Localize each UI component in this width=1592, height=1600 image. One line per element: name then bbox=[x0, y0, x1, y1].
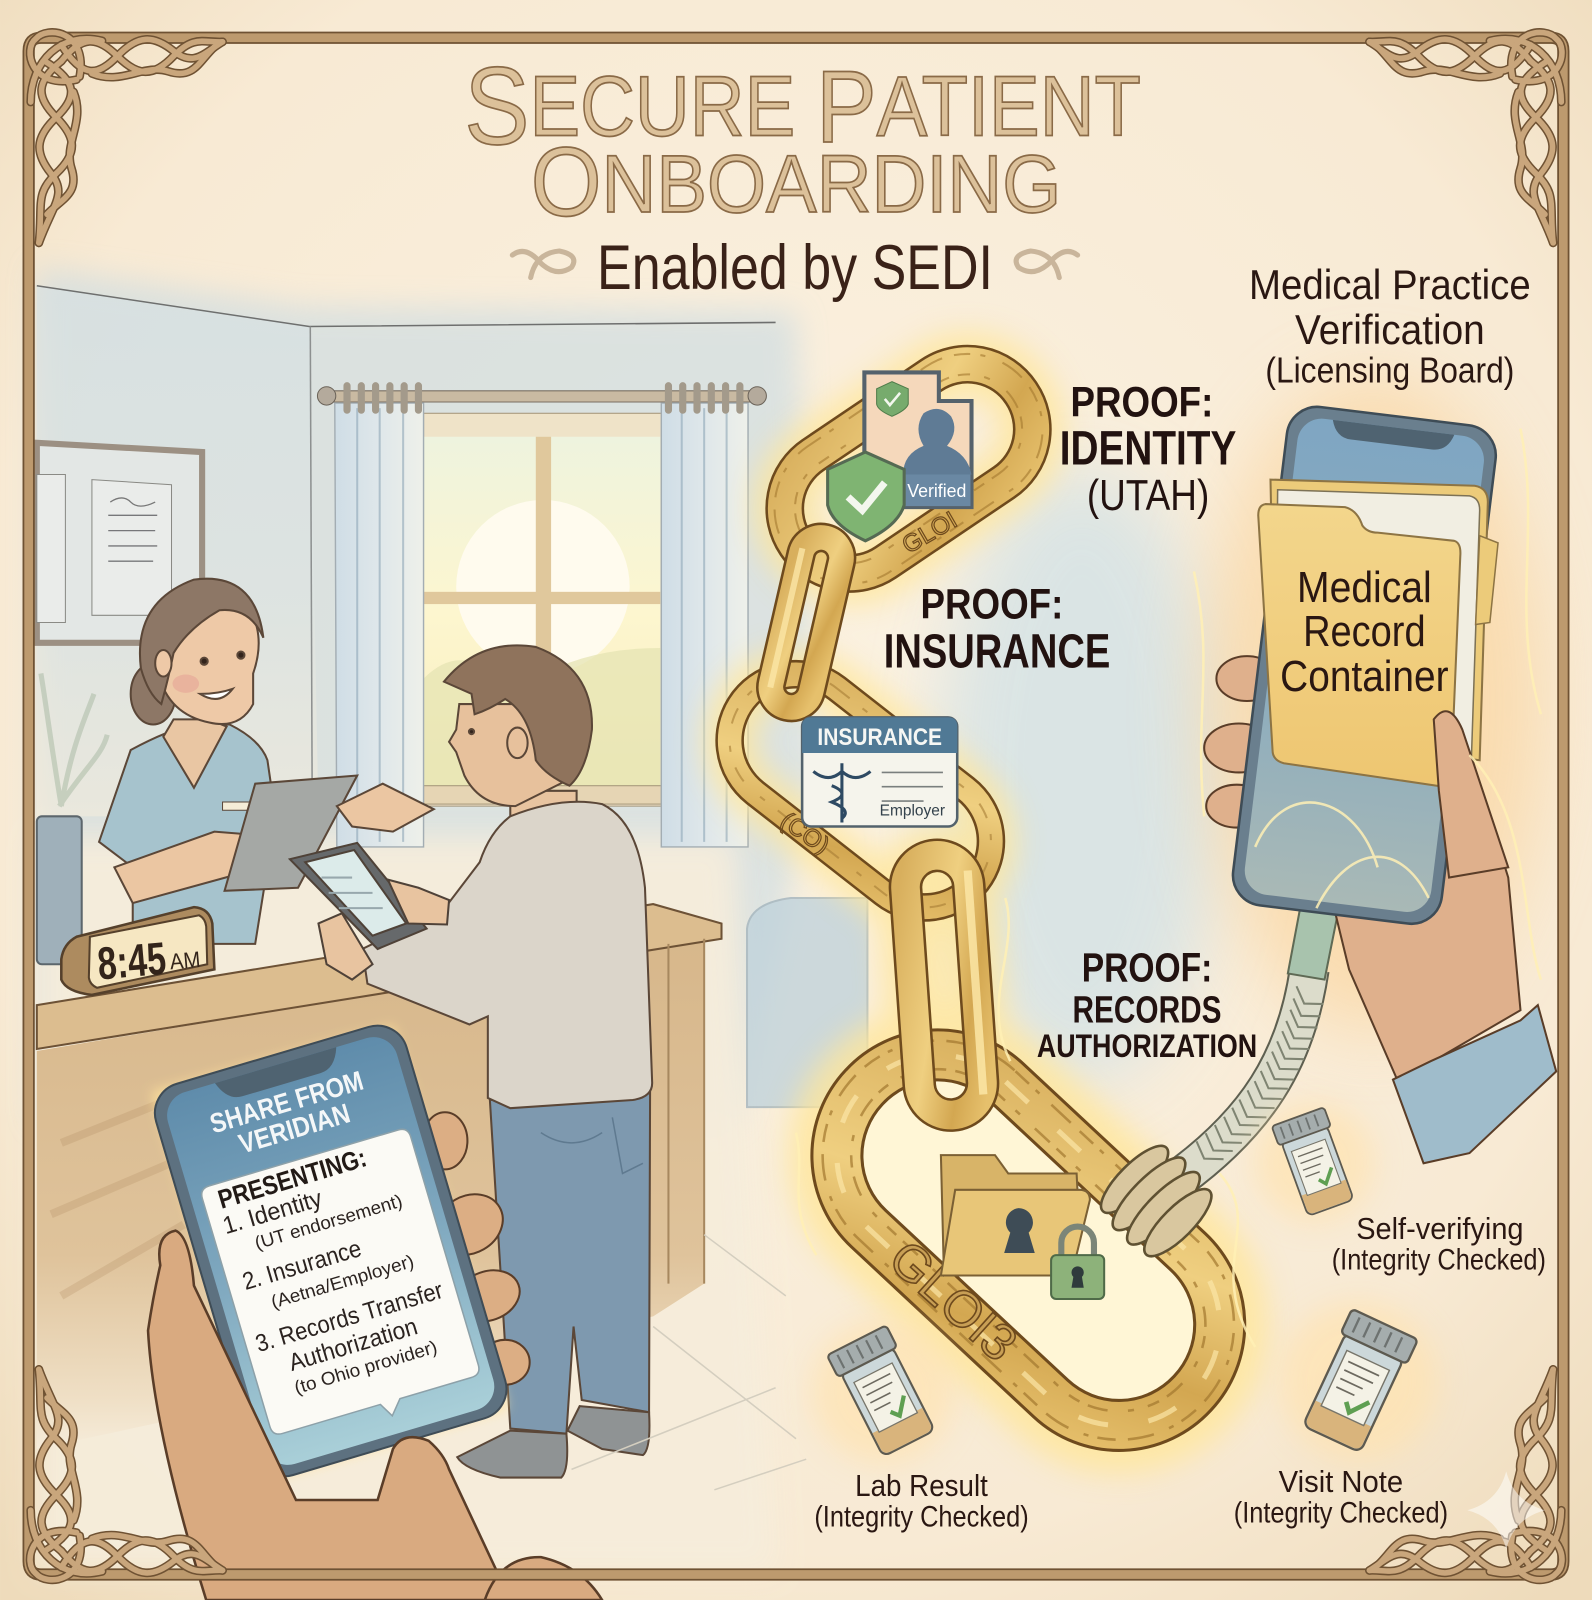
label: medical practice verification: Verification bbox=[1295, 306, 1485, 353]
label: lab result: (Integrity Checked) bbox=[814, 1501, 1029, 1534]
label: self-verifying bbox=[1332, 1212, 1546, 1276]
label: proof records authorization bbox=[1037, 945, 1257, 1064]
rope connector bbox=[1089, 903, 1339, 1268]
chain engravings: (CO) bbox=[775, 807, 834, 860]
room wash bbox=[37, 267, 1225, 1571]
reception desk bbox=[37, 904, 722, 1449]
bottle: self-verifying bbox=[1272, 1107, 1357, 1217]
label: medical practice verification: (Licensing Board) bbox=[1265, 351, 1514, 391]
foreground hand bbox=[148, 1231, 602, 1600]
sparkle watermark bbox=[1467, 1471, 1545, 1549]
label: proof identity: (UTAH) bbox=[1087, 471, 1209, 520]
corner knot bottom right bbox=[1369, 1369, 1562, 1580]
label: lab result: Lab Result bbox=[855, 1469, 988, 1503]
label: proof insurance bbox=[884, 580, 1110, 678]
chain link four bbox=[903, 853, 985, 1117]
icon: locked folder bbox=[941, 1155, 1090, 1276]
verified text: Verified bbox=[907, 480, 966, 501]
phone heading line two: VERIDIAN bbox=[235, 1097, 354, 1160]
glow behind right phone bbox=[1204, 378, 1541, 1031]
item one detail: (UT endorsement) bbox=[252, 1190, 405, 1253]
item three line two: Authorization bbox=[286, 1313, 421, 1377]
bottle halos bbox=[811, 1103, 1438, 1463]
label: visit note: Visit Note bbox=[1279, 1465, 1403, 1499]
label: proof identity bbox=[1060, 378, 1236, 520]
folder papers bbox=[1270, 480, 1498, 760]
chain engravings: GLOI bbox=[898, 507, 962, 559]
sleeve bbox=[1393, 1005, 1556, 1163]
framed poster bbox=[37, 443, 202, 643]
flourish right bbox=[1016, 251, 1078, 278]
phone: share from Veridian bbox=[147, 1018, 514, 1484]
folder text line three: Container bbox=[1280, 652, 1449, 701]
patient tablet and hands bbox=[290, 843, 449, 980]
chain link three bbox=[703, 647, 1018, 934]
chain link one bbox=[746, 325, 1071, 613]
title line one: ATIENT bbox=[877, 59, 1141, 155]
subtitle: Enabled by SEDI bbox=[597, 233, 993, 303]
item three detail: (to Ohio provider) bbox=[292, 1336, 439, 1398]
armchair bbox=[747, 898, 867, 1107]
label: proof identity: IDENTITY bbox=[1060, 422, 1236, 475]
label: proof insurance: PROOF: bbox=[920, 580, 1063, 628]
icon: green padlock bbox=[1051, 1227, 1104, 1299]
hand holding record phone bbox=[1204, 656, 1556, 1163]
item one: 1. Identity bbox=[220, 1185, 326, 1240]
item two: 2. Insurance bbox=[239, 1235, 365, 1296]
label: self-verifying: (Integrity Checked) bbox=[1332, 1243, 1546, 1276]
title line one: ECURE bbox=[529, 59, 816, 155]
clock time: 8:45 bbox=[95, 932, 168, 990]
chain link five bbox=[775, 993, 1281, 1487]
label: proof insurance: INSURANCE bbox=[884, 625, 1110, 678]
label: medical practice verification bbox=[1249, 261, 1531, 391]
presenting label: PRESENTING: bbox=[215, 1142, 370, 1215]
label: visit note bbox=[1234, 1465, 1448, 1529]
label: proof records authorization: RECORDS bbox=[1073, 988, 1222, 1030]
chain engravings bbox=[775, 507, 1028, 1372]
bottle: lab result bbox=[827, 1325, 939, 1458]
curtains and rod bbox=[317, 386, 766, 847]
thumb over folder bbox=[1434, 711, 1508, 878]
record phone bbox=[1229, 403, 1499, 927]
title line one: S bbox=[464, 45, 529, 168]
corner knot top left bbox=[30, 32, 223, 243]
flourish left bbox=[512, 251, 574, 278]
folder text line two: Record bbox=[1303, 607, 1426, 656]
corner knot top right bbox=[1369, 32, 1562, 243]
bottle: visit note bbox=[1298, 1309, 1418, 1454]
employer label: Employer bbox=[880, 802, 945, 819]
nurse bbox=[99, 579, 434, 944]
clock meridiem: AM bbox=[169, 947, 201, 974]
hand fingers behind phone bbox=[423, 1112, 530, 1385]
corner knot bottom left bbox=[30, 1369, 223, 1580]
phone heading: SHARE FROM bbox=[206, 1065, 367, 1139]
icon: small shield bbox=[877, 382, 908, 416]
label: visit note: (Integrity Checked) bbox=[1234, 1496, 1448, 1529]
title line two: O bbox=[531, 126, 602, 236]
floor lines bbox=[572, 1235, 806, 1490]
chain engravings: GLOI3 bbox=[878, 1229, 1028, 1372]
icon: verified identity card bbox=[828, 372, 972, 541]
label: medical practice verification: Medical Practice bbox=[1249, 261, 1531, 308]
title bbox=[464, 45, 1141, 236]
folder text line one: Medical bbox=[1297, 563, 1432, 612]
item two detail: (Aetna/Employer) bbox=[268, 1250, 416, 1312]
title line two: NBOARDING bbox=[602, 139, 1061, 230]
monitor bbox=[37, 816, 82, 964]
rope ferrule bbox=[1288, 903, 1339, 980]
label: proof records authorization: AUTHORIZATION bbox=[1037, 1027, 1257, 1064]
insurance heading: INSURANCE bbox=[817, 724, 942, 751]
label: self-verifying: Self-verifying bbox=[1356, 1212, 1524, 1246]
clock bbox=[61, 907, 214, 995]
chain glow bbox=[703, 339, 1261, 1467]
label: lab result bbox=[814, 1469, 1029, 1534]
message bubble bbox=[199, 1127, 485, 1450]
energy lines bbox=[796, 429, 1541, 1347]
phone glow bbox=[151, 1026, 507, 1480]
icon: large green shield bbox=[828, 452, 904, 541]
rope knot bbox=[1089, 1134, 1223, 1268]
window bbox=[424, 413, 664, 806]
label: proof records authorization: PROOF: bbox=[1082, 945, 1212, 991]
plant bbox=[41, 673, 107, 806]
patient bbox=[362, 645, 652, 1478]
icon: insurance card bbox=[802, 717, 957, 827]
label: proof identity: PROOF: bbox=[1070, 378, 1213, 426]
item three: 3. Records Transfer bbox=[253, 1277, 446, 1358]
icon: caduceus bbox=[813, 763, 870, 822]
chain link two bbox=[767, 533, 846, 712]
medical record folder bbox=[1258, 504, 1460, 786]
title line one: P bbox=[816, 50, 877, 164]
